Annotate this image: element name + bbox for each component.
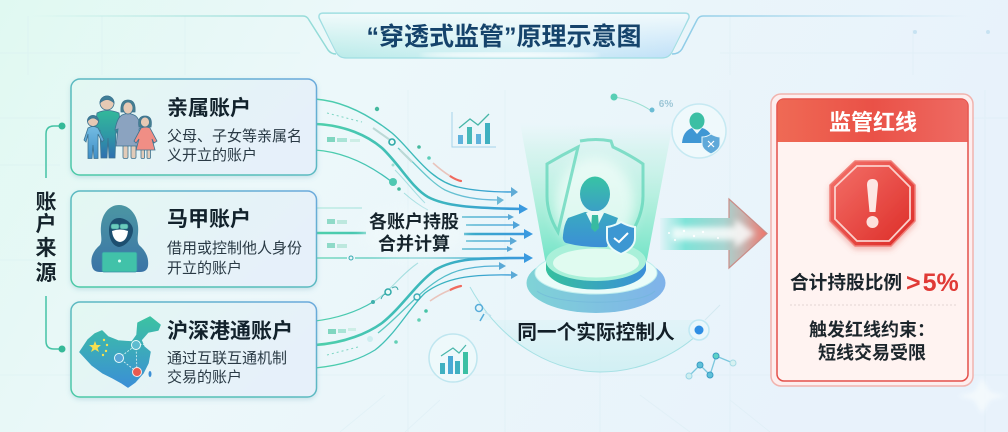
sparkle xyxy=(958,378,1006,414)
card: shell accounts: 借用或控制他人身份 xyxy=(167,240,302,257)
icon: circled chart xyxy=(429,334,477,382)
side label: account sources: 来 xyxy=(36,237,56,260)
card: relatives xyxy=(71,79,316,175)
target dot xyxy=(689,320,709,340)
light beam xyxy=(520,123,673,265)
icon: check shield xyxy=(607,222,635,254)
6% marker xyxy=(610,94,673,112)
merge label: 各账户持股 xyxy=(369,211,459,232)
card: stock connect: 交易的账户 xyxy=(167,368,242,386)
icon: family xyxy=(84,96,157,158)
6% marker: 6% xyxy=(659,99,673,110)
small node xyxy=(476,304,491,321)
shield outline xyxy=(547,140,643,232)
ratio text: 合计持股比例 xyxy=(790,272,902,293)
big arrow xyxy=(660,199,767,268)
card: relatives: 义开立的账户 xyxy=(167,147,257,164)
panel: regulatory red line xyxy=(771,94,973,386)
icon: person xyxy=(563,176,618,247)
consequence text: 触发红线约束： xyxy=(809,319,935,340)
bowl arc xyxy=(470,287,720,372)
base xyxy=(526,241,666,313)
icon: stop sign warning xyxy=(830,161,915,246)
title: “穿透式监管”原理示意图 xyxy=(366,22,642,51)
side label: account sources xyxy=(36,122,66,352)
icon: china map xyxy=(80,317,160,387)
card: stock connect xyxy=(71,302,316,397)
network icon xyxy=(686,353,736,379)
side label: account sources: 户 xyxy=(36,213,56,236)
panel: regulatory red line: 监管红线 xyxy=(829,110,917,135)
controller label: 同一个实际控制人 xyxy=(517,321,675,344)
panel header xyxy=(778,100,968,142)
icon: hacker xyxy=(91,205,148,272)
threshold: >5% xyxy=(906,269,959,297)
title plate xyxy=(30,13,970,58)
central platform xyxy=(520,123,673,313)
panel: regulatory red line: 短线交易受限 xyxy=(818,342,926,363)
flow lines xyxy=(315,99,525,368)
card: stock connect: 通过互联互通机制 xyxy=(167,350,287,367)
icon: circled person with shield xyxy=(672,104,726,158)
merge label: 合并计算 xyxy=(378,233,450,254)
side label: account sources: 源 xyxy=(36,262,56,285)
card: relatives: 父母、子女等亲属名 xyxy=(167,127,302,145)
card: shell accounts: 马甲账户 xyxy=(167,208,251,231)
merge label xyxy=(364,209,464,257)
icon: bar chart xyxy=(452,112,496,147)
side label: account sources: 账 xyxy=(36,191,56,214)
arrowheads xyxy=(497,187,533,279)
card: relatives: 亲属账户 xyxy=(167,97,251,120)
card: stock connect: 沪深港通账户 xyxy=(167,320,293,343)
card: shell accounts: 开立的账户 xyxy=(167,260,242,277)
card: shell accounts xyxy=(71,191,316,287)
